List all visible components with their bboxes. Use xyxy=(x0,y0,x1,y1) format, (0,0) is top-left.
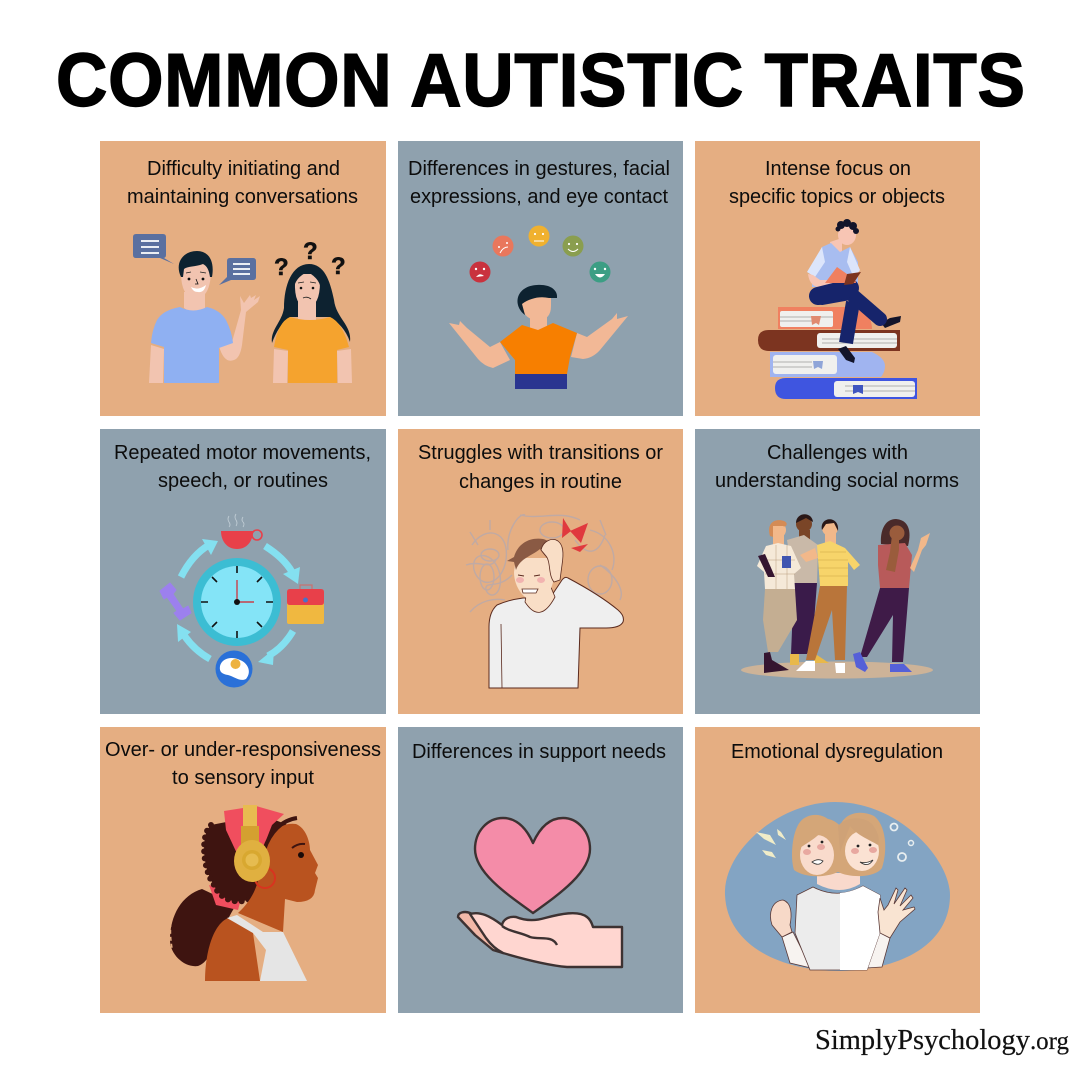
heading: sensory input xyxy=(105,739,381,789)
icon: two people talking: ? xyxy=(331,253,346,280)
heading: emotional dysregulation: Emotional dysregulation xyxy=(731,741,943,763)
panel: transitions xyxy=(398,429,683,714)
icon: stressed man holding head xyxy=(466,515,623,688)
heading: intense focus xyxy=(729,158,945,208)
panel: social norms xyxy=(695,429,980,714)
heading: gestures: Differences in gestures, facial xyxy=(408,158,670,180)
icon: heart over open hand xyxy=(458,818,622,967)
title: COMMON AUTISTIC TRAITS xyxy=(56,39,1025,122)
panel: gestures xyxy=(398,141,683,416)
heading: transitions: Struggles with transitions or xyxy=(418,442,663,464)
heading: gestures: expressions, and eye contact xyxy=(410,186,668,208)
panel: intense focus xyxy=(695,141,980,416)
icon: two people talking xyxy=(133,234,352,383)
icon: woman with headphones xyxy=(170,805,318,981)
heading: transitions: changes in routine xyxy=(459,471,622,493)
source credit: SimplyPsychology.org xyxy=(815,1025,1069,1056)
icon: two people talking: ? xyxy=(303,238,318,265)
heading: intense focus: specific topics or objects xyxy=(729,186,945,208)
panel: support needs xyxy=(398,727,683,1013)
heading: conversations xyxy=(127,158,358,208)
heading: social norms: Challenges with xyxy=(767,442,908,464)
panel: conversations xyxy=(100,141,386,416)
panel: repeated movements xyxy=(100,429,386,714)
heading: repeated movements: Repeated motor movements, xyxy=(114,442,371,464)
heading: sensory input: to sensory input xyxy=(172,767,314,789)
icon: daily routine clock cycle xyxy=(160,514,324,688)
panel: emotional dysregulation xyxy=(695,727,980,1013)
icon: two-faced person xyxy=(725,802,950,971)
heading: social norms: understanding social norms xyxy=(715,470,959,492)
heading: conversations: maintaining conversations xyxy=(127,186,358,208)
heading: gestures xyxy=(408,158,670,208)
heading: transitions xyxy=(418,442,663,493)
heading: sensory input: Over- or under-responsiveness xyxy=(105,739,381,761)
panel: sensory input xyxy=(100,727,386,1013)
icon: two people talking: ? xyxy=(274,254,289,281)
icon: man reading on books xyxy=(758,219,917,399)
heading: support needs: Differences in support needs xyxy=(412,741,666,763)
icon: person with emotion faces xyxy=(449,226,628,389)
heading: intense focus: Intense focus on xyxy=(765,158,911,180)
heading: conversations: Difficulty initiating and xyxy=(147,158,340,180)
heading: repeated movements: speech, or routines xyxy=(158,470,328,492)
icon: group of people xyxy=(741,514,933,678)
heading: social norms xyxy=(715,442,959,492)
heading: repeated movements xyxy=(114,442,371,492)
